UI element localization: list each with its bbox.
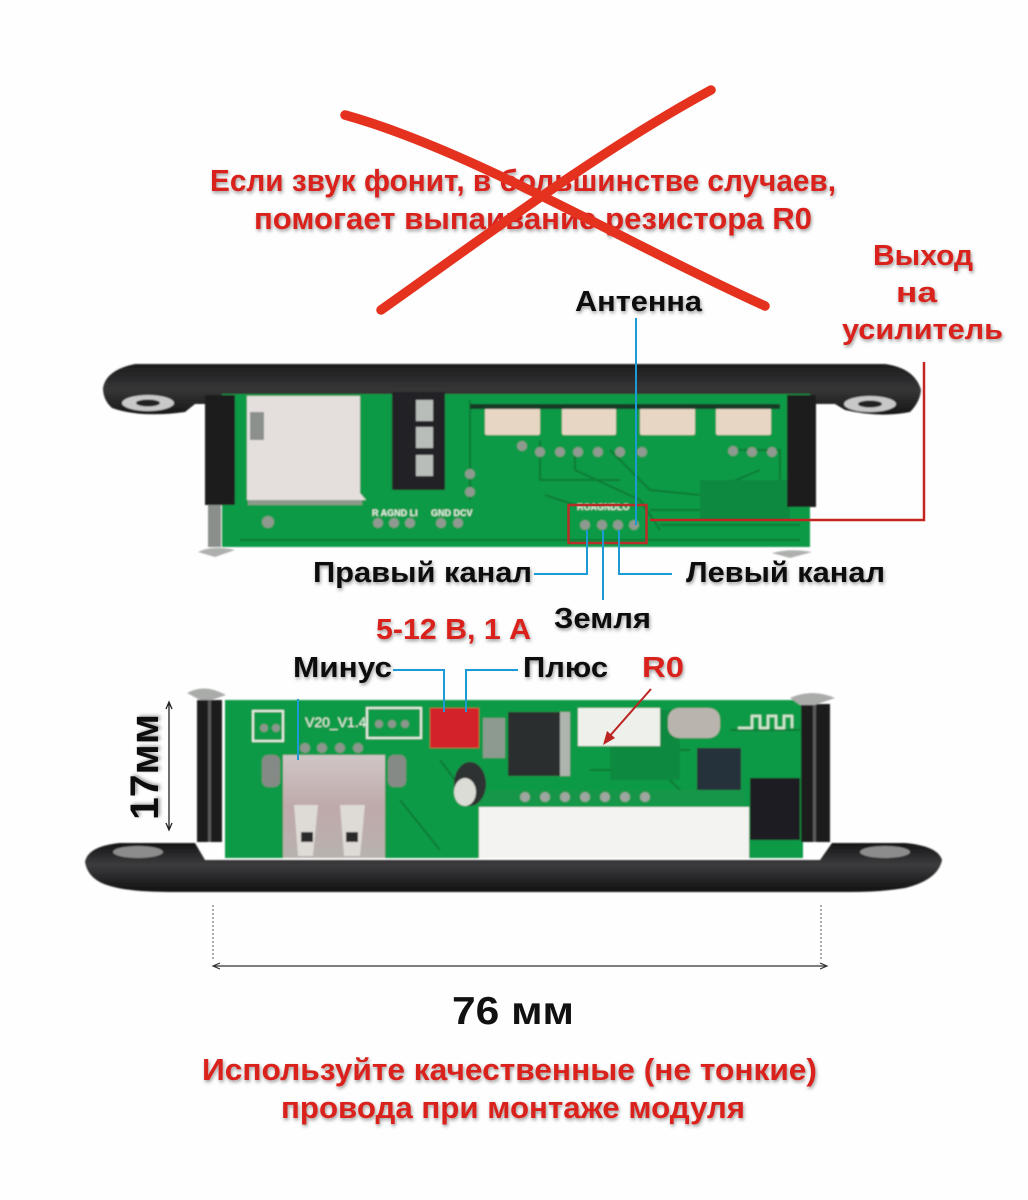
warning text: Если звук фонит, в большинстве случаев, <box>210 163 836 198</box>
screws <box>187 688 835 705</box>
width dimension <box>213 905 827 1033</box>
output pads highlight <box>568 505 646 543</box>
top view of module <box>103 364 921 558</box>
label: R0: R0 <box>642 652 684 684</box>
bottom view of module <box>85 688 942 892</box>
width dimension: 76 мм <box>452 990 574 1033</box>
faceplate <box>85 843 942 892</box>
crystal <box>668 708 720 738</box>
push buttons <box>485 408 771 435</box>
regulator IC <box>508 712 560 776</box>
label: amplifier output <box>842 240 1003 346</box>
R0 arrow <box>608 689 651 738</box>
silkscreen labels: GND DCV <box>431 508 473 518</box>
warning text: помогает выпаивание резистора R0 <box>254 201 812 236</box>
white connector <box>578 708 660 746</box>
silkscreen labels: R AGND LI <box>372 508 418 518</box>
faceplate <box>103 364 921 415</box>
label: amplifier output: на <box>896 277 938 309</box>
label: plus: Плюс <box>523 652 608 684</box>
screws <box>198 548 812 558</box>
mounting posts <box>205 395 235 505</box>
circuit board <box>225 700 803 858</box>
mounting posts <box>197 700 222 842</box>
warning text <box>210 163 836 236</box>
SD card slot <box>247 396 366 500</box>
footer note: Используйте качественные (не тонкие) <box>202 1052 817 1087</box>
label: antenna: Антенна <box>575 286 703 318</box>
minus and plus lines <box>298 670 518 760</box>
silkscreen labels <box>372 502 630 518</box>
bluetooth chip <box>697 748 741 790</box>
label: left channel: Левый канал <box>686 557 885 589</box>
display connector block <box>479 807 749 858</box>
green circuit board <box>222 394 810 547</box>
label: right channel: Правый канал <box>313 557 532 589</box>
silkscreen labels: ROAGNDLO <box>577 502 630 512</box>
mounting holes <box>122 395 896 412</box>
solder pads <box>262 441 777 530</box>
footer note: провода при монтаже модуля <box>281 1090 745 1125</box>
USB port <box>283 755 385 858</box>
audio jack <box>392 392 445 490</box>
red cross-out <box>345 90 765 310</box>
label: amplifier output: Выход <box>873 240 973 272</box>
header outlines <box>253 708 421 741</box>
label: ground: Земля <box>554 603 651 635</box>
footer note <box>202 1052 817 1125</box>
antenna trace <box>738 716 792 728</box>
label: voltage: 5-12 В, 1 А <box>376 614 531 646</box>
antenna line <box>635 318 637 525</box>
power connector <box>430 708 479 748</box>
IR receiver <box>750 778 800 840</box>
label: amplifier output: усилитель <box>842 314 1003 346</box>
silkscreen version: V20_V1.4 <box>305 714 367 730</box>
label: minus: Минус <box>293 652 392 684</box>
mounting holes <box>113 846 910 858</box>
height dimension: 17мм <box>123 714 167 820</box>
capacitor <box>454 762 486 806</box>
channel lines <box>534 530 672 600</box>
amplifier output line <box>650 362 924 520</box>
